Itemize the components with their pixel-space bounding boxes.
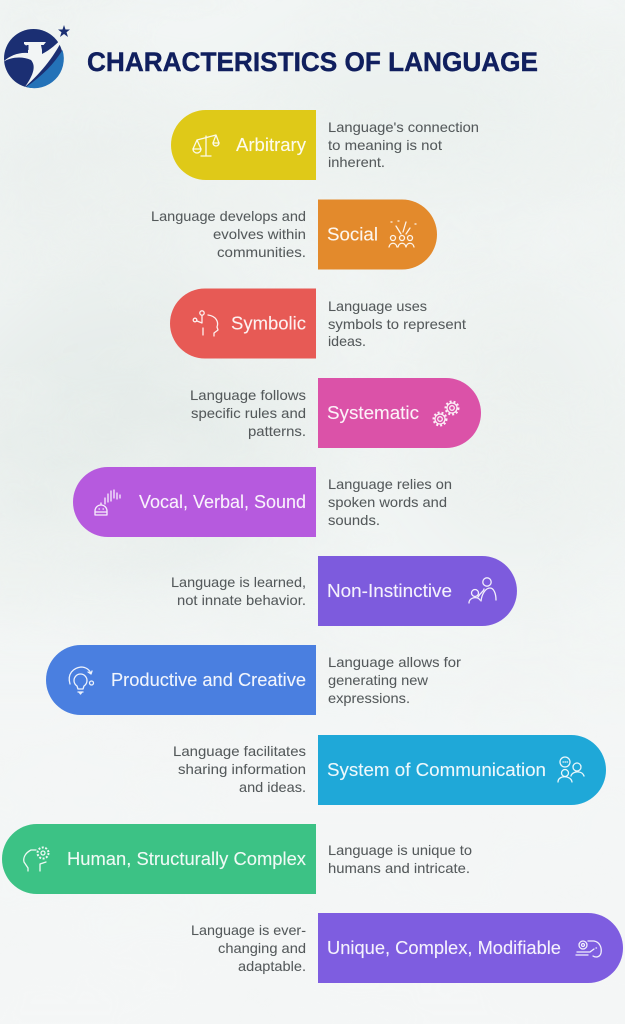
description: Productive and Creative: expressions. bbox=[328, 690, 410, 706]
row: Systematic bbox=[190, 378, 481, 448]
description: Arbitrary bbox=[328, 119, 479, 170]
description: Human, Structurally Complex bbox=[328, 842, 472, 876]
icon: voice robot bbox=[95, 490, 120, 515]
description: System of Communication: Language facilitates bbox=[173, 743, 306, 759]
description: Systematic: patterns. bbox=[248, 423, 306, 439]
row: Social bbox=[151, 200, 437, 270]
pill: Unique, Complex, Modifiable bbox=[318, 913, 623, 983]
icon: gears bbox=[434, 402, 458, 426]
description: Unique, Complex, Modifiable: Language is ever- bbox=[191, 922, 306, 938]
row: Human, Structurally Complex bbox=[2, 824, 472, 894]
label: Unique, Complex, Modifiable: Unique, Complex, Modifiable bbox=[327, 938, 561, 958]
icon: conversation bbox=[558, 757, 584, 782]
description: Non-Instinctive: not innate behavior. bbox=[177, 592, 306, 608]
label: Vocal, Verbal, Sound: Vocal, Verbal, Sound bbox=[139, 492, 306, 512]
description: Human, Structurally Complex: humans and intricate. bbox=[328, 860, 470, 876]
pill: Symbolic bbox=[170, 288, 316, 358]
description: Unique, Complex, Modifiable bbox=[191, 922, 306, 974]
description: Unique, Complex, Modifiable: adaptable. bbox=[238, 958, 306, 974]
description: Symbolic: Language uses bbox=[328, 298, 427, 314]
description: Productive and Creative: generating new bbox=[328, 672, 429, 688]
description: Productive and Creative bbox=[328, 654, 461, 706]
pill: Vocal, Verbal, Sound bbox=[73, 467, 316, 537]
label: Non-Instinctive: Non-Instinctive bbox=[327, 581, 452, 601]
description: Non-Instinctive: Language is learned, bbox=[171, 574, 306, 590]
description: System of Communication bbox=[173, 743, 306, 795]
description: Arbitrary: Language's connection bbox=[328, 119, 479, 135]
description: Social: Language develops and bbox=[151, 208, 306, 224]
row: System of Communication bbox=[173, 735, 606, 805]
description: Systematic: Language follows bbox=[190, 387, 306, 403]
pill: Systematic bbox=[318, 378, 481, 448]
description: Vocal, Verbal, Sound bbox=[328, 476, 452, 528]
icon: people learning bbox=[469, 578, 496, 603]
icon: light bulb bbox=[69, 667, 94, 694]
pill: Arbitrary bbox=[171, 110, 316, 180]
row: Arbitrary bbox=[171, 110, 479, 180]
label: Arbitrary: Arbitrary bbox=[236, 135, 306, 155]
description: Symbolic: symbols to represent bbox=[328, 316, 466, 332]
description: Symbolic: ideas. bbox=[328, 333, 366, 349]
description: Arbitrary: inherent. bbox=[328, 154, 385, 170]
label: Human, Structurally Complex: Human, Structurally Complex bbox=[67, 849, 306, 869]
description: Productive and Creative: Language allows for bbox=[328, 654, 461, 670]
description: Systematic: specific rules and bbox=[191, 405, 306, 421]
logo bbox=[3, 25, 70, 88]
description: Symbolic bbox=[328, 298, 466, 349]
label: Symbolic: Symbolic bbox=[231, 314, 306, 334]
pill: Non-Instinctive bbox=[318, 556, 517, 626]
description: Social: communities. bbox=[217, 244, 306, 260]
icon: community bbox=[389, 221, 416, 247]
title: CHARACTERISTICS OF LANGUAGE bbox=[87, 47, 538, 77]
row: Vocal, Verbal, Sound bbox=[73, 467, 452, 537]
row: Unique, Complex, Modifiable bbox=[191, 913, 623, 983]
pill: Social bbox=[318, 200, 437, 270]
label: System of Communication: System of Communication bbox=[327, 760, 546, 780]
description: Arbitrary: to meaning is not bbox=[328, 137, 442, 153]
description: System of Communication: and ideas. bbox=[239, 779, 306, 795]
icon: human head with gear bbox=[24, 848, 48, 871]
pill: System of Communication bbox=[318, 735, 606, 805]
label: Social: Social bbox=[327, 224, 378, 244]
pill: Productive and Creative bbox=[46, 645, 316, 715]
description: Unique, Complex, Modifiable: changing and bbox=[218, 940, 306, 956]
description: Social bbox=[151, 208, 306, 260]
row: Productive and Creative bbox=[46, 645, 461, 715]
description: Non-Instinctive bbox=[171, 574, 306, 608]
description: System of Communication: sharing information bbox=[178, 761, 306, 777]
icon: chameleon bbox=[576, 941, 601, 957]
row: Symbolic bbox=[170, 288, 466, 358]
description: Social: evolves within bbox=[213, 226, 306, 242]
description: Vocal, Verbal, Sound: Language relies on bbox=[328, 476, 452, 492]
row: Non-Instinctive bbox=[171, 556, 517, 626]
description: Human, Structurally Complex: Language is unique to bbox=[328, 842, 472, 858]
description: Vocal, Verbal, Sound: sounds. bbox=[328, 512, 380, 528]
description: Systematic bbox=[190, 387, 306, 439]
icon: scales bbox=[193, 135, 219, 156]
description: Vocal, Verbal, Sound: spoken words and bbox=[328, 494, 447, 510]
label: Systematic: Systematic bbox=[327, 403, 419, 423]
icon: symbolic head bbox=[193, 311, 218, 336]
label: Productive and Creative: Productive and Creative bbox=[111, 670, 306, 690]
pill: Human, Structurally Complex bbox=[2, 824, 316, 894]
